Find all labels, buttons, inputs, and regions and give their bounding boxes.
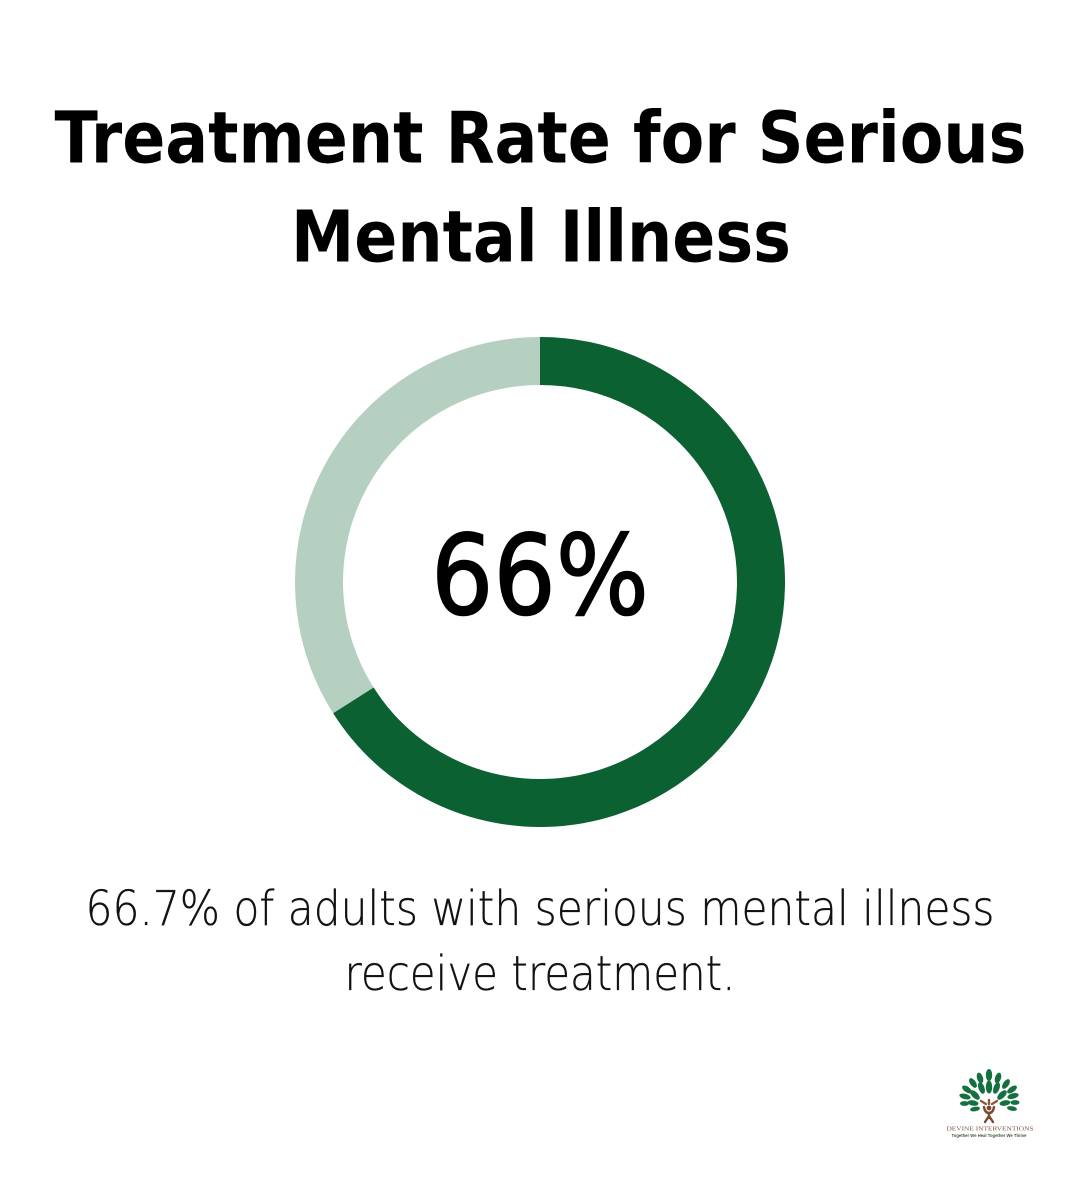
description text	[86, 881, 994, 1002]
donut value segment	[353, 361, 761, 803]
logo tagline: Together We Heal Together We Thrive	[952, 1133, 1027, 1138]
donut remainder segment	[319, 361, 540, 700]
donut centre value: 66%	[431, 512, 649, 641]
donut chart: 66%	[319, 361, 761, 803]
logo tree trunk figure	[981, 1100, 997, 1122]
logo: Devine Interventions	[946, 1069, 1034, 1138]
description text: receive treatment.	[344, 946, 736, 1002]
logo tree leaves	[959, 1069, 1020, 1112]
title	[54, 96, 1026, 278]
logo name: DEVINE INTERVENTIONS	[946, 1126, 1034, 1132]
title: Mental Illness	[291, 196, 791, 278]
